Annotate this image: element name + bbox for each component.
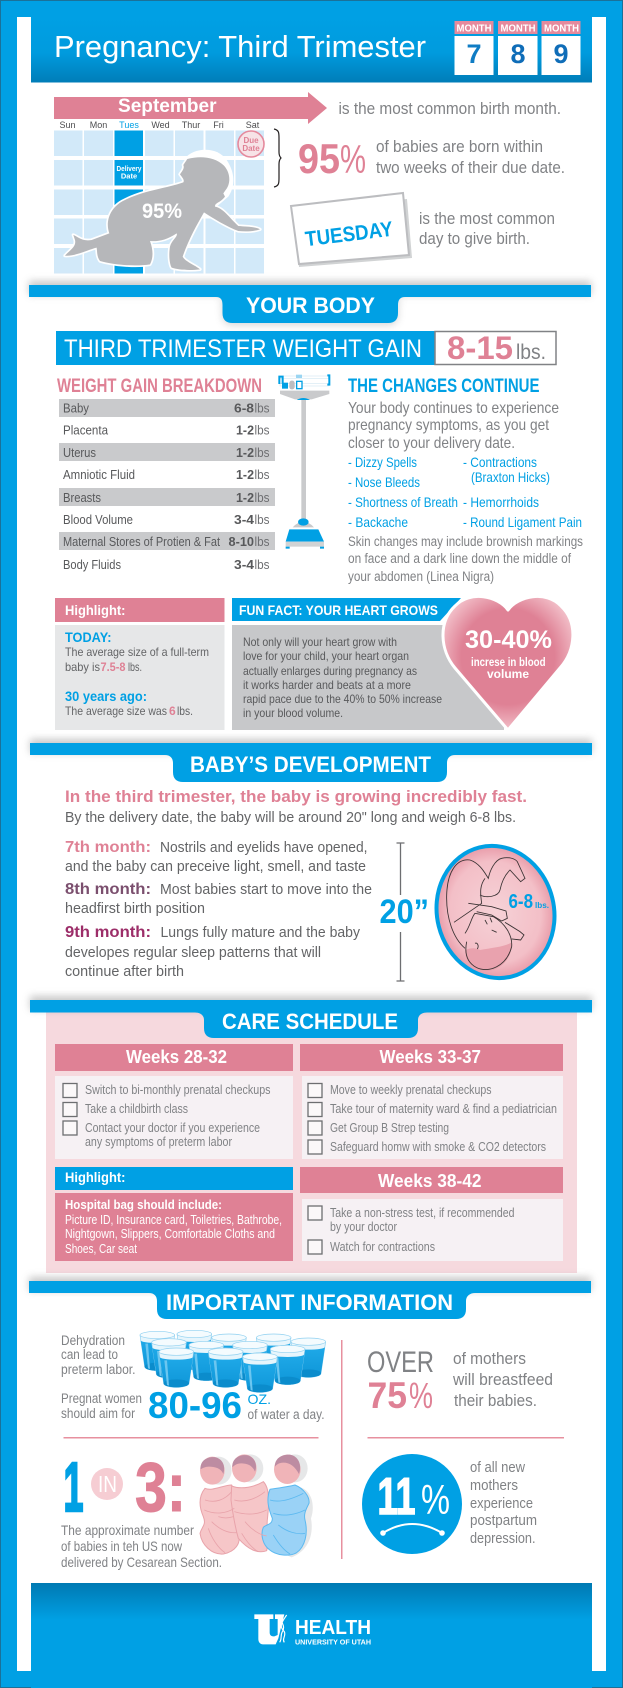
calendar with crawling baby: [54, 120, 264, 274]
pink dividers: [64, 1340, 564, 1559]
panel: weeks 28-32: Weeks 28-32: [126, 1046, 227, 1067]
the changes continue: pregnancy symptoms, as you get: [348, 417, 549, 434]
panel: weeks 33-37: Move to weekly prenatal checkups: [330, 1082, 492, 1097]
dehydration text: Dehydration: [61, 1333, 125, 1348]
1 in 3 stat: 1: [64, 1448, 84, 1526]
panel: hospital bag highlight: Hospital bag should include:: [65, 1197, 222, 1212]
panel: weeks 33-37: Weeks 33-37: [380, 1046, 481, 1067]
most common birth month text: is the most common birth month.: [338, 99, 561, 118]
panel: weeks 38-42: Watch for contractions: [330, 1239, 435, 1254]
the changes continue: - Shortness of Breath: [348, 494, 458, 510]
over 75 percent stat: their babies.: [454, 1391, 537, 1410]
weight gain breakdown table: lbs: [254, 557, 270, 572]
panel: weeks 33-37: [300, 1044, 563, 1159]
month calendar cards: [454, 21, 580, 75]
due date circle: Due: [243, 136, 259, 145]
panel: highlight today vs 30 years ago: lbs.: [128, 660, 142, 674]
1 in 3 stat: IN: [98, 1471, 117, 1497]
baby's development intro: In the third trimester, the baby is growing incredibly fast.: [65, 787, 527, 806]
dehydration text: preterm labor.: [61, 1362, 136, 1377]
weight gain banner: lbs.: [516, 341, 546, 364]
95 percent stat: two weeks of their due date.: [376, 158, 565, 177]
weight gain banner: [56, 330, 556, 366]
weight gain breakdown table: Baby: [63, 400, 89, 416]
weight gain banner: 8-15: [447, 330, 513, 366]
over 75 percent stat: will breastfeed: [452, 1370, 553, 1389]
September arrow: [54, 92, 327, 124]
section heading: your body: [29, 281, 591, 325]
20 inch length ruler: [380, 843, 429, 981]
water amount stat: of water a day.: [248, 1407, 324, 1422]
panel: fun fact heart: rapid pace due to the 40% to 50% increase: [243, 692, 442, 706]
panel: highlight today vs 30 years ago: baby is: [65, 660, 100, 674]
panel: highlight today vs 30 years ago: 7.5-8: [100, 660, 126, 674]
panel: highlight today vs 30 years ago: The average size was: [65, 704, 167, 718]
the changes continue: Skin changes may include brownish markings: [348, 534, 583, 549]
weight gain breakdown table: 1-2: [236, 422, 254, 438]
panel: fun fact heart: it works harder and beats at a more: [243, 678, 411, 692]
panel: weeks 28-32: Take a childbirth class: [85, 1101, 188, 1116]
icon: crawling baby silhouette: [65, 150, 260, 270]
the changes continue: closer to your delivery date.: [348, 435, 515, 452]
September arrow: September: [118, 96, 217, 117]
panel: fun fact heart: love for your child, your heart organ: [243, 649, 409, 663]
calendar with crawling baby: 95%: [142, 200, 182, 223]
month by month development: Nostrils and eyelids have opened,: [160, 839, 368, 856]
month calendar cards: MONTH: [456, 24, 492, 34]
calendar with crawling baby: Mon: [90, 120, 107, 130]
weight gain breakdown table: [57, 376, 275, 572]
11 percent stat: 11: [378, 1468, 416, 1526]
panel: weeks 33-37: Get Group B Strep testing: [330, 1120, 449, 1135]
calendar with crawling baby: Delivery: [116, 164, 142, 173]
weight gain breakdown table: Uterus: [63, 445, 96, 460]
over 75 percent stat: of mothers: [453, 1349, 526, 1368]
month calendar cards: 7: [466, 39, 482, 69]
panel: weeks 38-42: Take a non-stress test, if recommended: [330, 1205, 514, 1220]
section heading: your body: YOUR BODY: [246, 293, 375, 318]
month by month development: continue after birth: [65, 963, 184, 980]
logo: University of Utah Health: [254, 1614, 371, 1646]
panel: fun fact heart: [232, 596, 573, 730]
panel: fun fact heart: FUN FACT: YOUR HEART GROWS: [239, 602, 438, 618]
icon: heart callout: 30-40%: [465, 626, 552, 654]
header banner: [31, 17, 592, 82]
the changes continue: - Contractions: [463, 454, 537, 470]
month calendar cards: 9: [553, 39, 569, 69]
95 percent stat: %: [340, 138, 366, 182]
panel: highlight today vs 30 years ago: Highlight:: [65, 602, 126, 618]
calendar with crawling baby: Tues: [119, 120, 139, 130]
95 percent stat: of babies are born within: [376, 137, 543, 156]
panel: weeks 28-32: Contact your doctor if you experience: [85, 1120, 260, 1135]
weight gain banner: THIRD TRIMESTER WEIGHT GAIN: [64, 335, 422, 363]
panel: fun fact heart: Not only will your heart grow with: [243, 635, 397, 649]
panel: highlight today vs 30 years ago: lbs.: [177, 704, 193, 718]
1 in 3 stat: delivered by Cesarean Section.: [61, 1554, 222, 1570]
panel: hospital bag highlight: Shoes, Car seat: [65, 1241, 137, 1256]
11 percent stat: postpartum: [470, 1513, 537, 1529]
the changes continue: - Backache: [348, 514, 408, 530]
month by month development: 7th month:: [65, 839, 151, 856]
curly bracket: [274, 129, 281, 187]
the changes continue: on face and a dark line down the middle of: [348, 551, 571, 566]
footer banner: [31, 1583, 592, 1688]
over 75 percent stat: %: [409, 1375, 433, 1416]
11 percent stat: of all new: [470, 1460, 525, 1476]
weight gain breakdown table: 1-2: [236, 445, 254, 460]
11 percent stat: [362, 1454, 537, 1554]
section: care schedule: [30, 996, 592, 1273]
due date circle: [238, 131, 264, 157]
panel: highlight today vs 30 years ago: 6: [169, 704, 176, 718]
1 in 3 stat: 3:: [135, 1448, 186, 1526]
the changes continue: Your body continues to experience: [348, 400, 559, 417]
section heading: care schedule: CARE SCHEDULE: [222, 1009, 398, 1034]
weight gain breakdown table: Maternal Stores of Protien & Fat: [63, 534, 220, 549]
calendar with crawling baby: Sun: [59, 120, 76, 130]
most common day text: [419, 209, 555, 248]
over 75 percent stat: 75: [368, 1375, 407, 1416]
dehydration text: [61, 1333, 142, 1421]
section heading: care schedule: [30, 996, 592, 1038]
over 75 percent stat: OVER: [367, 1346, 434, 1379]
icon: fetus in womb: [423, 833, 568, 991]
panel: weeks 28-32: Switch to bi-monthly prenatal checkups: [85, 1082, 271, 1097]
panel: hospital bag highlight: Highlight:: [65, 1169, 126, 1185]
panel: weeks 28-32: [55, 1044, 293, 1159]
month by month development: Most babies start to move into the: [160, 881, 372, 898]
baby's development intro: By the delivery date, the baby will be around 20" long and weigh 6-8 lbs.: [65, 809, 516, 826]
panel: highlight today vs 30 years ago: The average size of a full-term: [65, 645, 209, 659]
11 percent stat: experience: [470, 1496, 533, 1512]
logo: University of Utah Health: HEALTH: [295, 1617, 371, 1639]
Tuesday calendar card: TUESDAY: [304, 218, 394, 251]
icon: heart callout: volume: [487, 667, 529, 681]
calendar with crawling baby: Thur: [182, 120, 200, 130]
water amount stat: OZ.: [248, 1391, 271, 1407]
panel: weeks 28-32: any symptoms of preterm labor: [85, 1134, 233, 1149]
panel: weeks 38-42: by your doctor: [330, 1219, 398, 1234]
1 in 3 stat: of babies in teh US now: [61, 1538, 183, 1554]
icon: doctor's scale: [279, 375, 329, 549]
weight gain breakdown table: lbs: [254, 422, 270, 438]
weight gain breakdown table: Blood Volume: [63, 512, 133, 527]
section heading: important information: IMPORTANT INFORMATION: [166, 1290, 453, 1315]
95 percent stat: [298, 135, 565, 182]
panel: hospital bag highlight: Nightgown, Slippers, Comfortable Cloths and: [65, 1226, 275, 1241]
panel: hospital bag highlight: Picture ID, Insurance card, Toiletries, Bathrobe,: [65, 1212, 282, 1227]
11 percent stat: depression.: [470, 1531, 536, 1547]
11 percent stat: mothers: [470, 1478, 518, 1494]
calendar with crawling baby: Fri: [213, 120, 224, 130]
11 percent stat: %: [421, 1476, 450, 1523]
dehydration text: Pregnat women: [61, 1391, 142, 1406]
the changes continue: - Nose Bleeds: [348, 474, 420, 490]
weight gain breakdown table: 3-4: [234, 557, 255, 572]
panel: highlight today vs 30 years ago: [55, 598, 224, 730]
weight gain breakdown table: Amniotic Fluid: [63, 467, 135, 482]
the changes continue: [348, 376, 583, 584]
panel: highlight today vs 30 years ago: 30 years ago:: [65, 688, 147, 704]
weight gain breakdown table: Placenta: [63, 422, 109, 438]
the changes continue: - Dizzy Spells: [348, 454, 417, 470]
calendar with crawling baby: Wed: [151, 120, 170, 130]
month by month development: 8th month:: [65, 881, 151, 898]
section heading: important information: [29, 1277, 591, 1319]
weight gain breakdown table: lbs: [254, 400, 270, 416]
weight gain breakdown table: lbs: [254, 467, 270, 482]
20 inch length ruler: 20”: [380, 893, 429, 931]
weight gain breakdown table: 1-2: [236, 490, 254, 505]
baby's development intro: [65, 787, 527, 826]
weight gain breakdown table: 6-8: [234, 400, 254, 416]
1 in 3 stat: The approximate number: [61, 1522, 194, 1538]
due date circle: Date: [242, 144, 260, 153]
weight gain breakdown table: WEIGHT GAIN BREAKDOWN: [57, 376, 262, 397]
calendar with crawling baby: Date: [121, 172, 137, 180]
panel: highlight today vs 30 years ago: TODAY:: [65, 629, 112, 645]
weight gain breakdown table: 8-10: [228, 534, 254, 549]
icon: swaddled babies: [200, 1454, 313, 1557]
dehydration text: can lead to: [61, 1347, 118, 1362]
icon: heart callout: increse in blood: [471, 655, 546, 669]
water amount stat: [148, 1385, 324, 1426]
most common day text: is the most common: [419, 209, 555, 228]
most common day text: day to give birth.: [419, 229, 530, 248]
1 in 3 stat: [61, 1448, 222, 1570]
panel: hospital bag highlight: [55, 1167, 293, 1261]
month by month development: Lungs fully mature and the baby: [160, 924, 360, 941]
panel: weeks 33-37: Safeguard homw with smoke & CO2 detectors: [330, 1139, 546, 1154]
the changes continue: - Hemorrhoids: [463, 494, 539, 510]
weight gain breakdown table: Breasts: [63, 490, 101, 505]
weight gain breakdown table: lbs: [254, 490, 270, 505]
month by month development: developes regular sleep patterns that will: [65, 944, 321, 961]
month by month development: headfirst birth position: [65, 900, 205, 917]
calendar with crawling baby: Sat: [246, 120, 260, 130]
title: Pregnancy: Third Trimester: [54, 29, 426, 64]
icon: water glasses: [140, 1330, 326, 1392]
month by month development: 9th month:: [65, 924, 151, 941]
Tuesday calendar card: [291, 193, 412, 267]
water amount stat: 80-96: [148, 1385, 242, 1426]
weight gain breakdown table: 1-2: [236, 467, 254, 482]
over 75 percent stat: [367, 1346, 553, 1416]
weight gain breakdown table: lbs: [254, 512, 270, 527]
dehydration text: should aim for: [61, 1406, 135, 1421]
95 percent stat: 95: [298, 135, 340, 182]
month calendar cards: MONTH: [544, 24, 579, 34]
icon: fetus in womb: 6-8: [508, 891, 533, 913]
weight gain breakdown table: lbs: [254, 534, 270, 549]
the changes continue: - Round Ligament Pain: [463, 514, 582, 530]
month by month development: and the baby can preceive light, smell, and taste: [65, 858, 366, 875]
logo: University of Utah Health: UNIVERSITY OF UTAH: [295, 1638, 371, 1646]
the changes continue: THE CHANGES CONTINUE: [348, 376, 540, 397]
month calendar cards: MONTH: [500, 24, 536, 34]
weight gain breakdown table: Body Fluids: [63, 557, 121, 572]
icon: fetus in womb: lbs.: [535, 901, 549, 910]
panel: fun fact heart: in your blood volume.: [243, 706, 343, 720]
panel: weeks 33-37: Take tour of maternity ward & find a pediatrician: [330, 1101, 557, 1116]
icon: heart callout: [443, 596, 573, 730]
panel: weeks 38-42: [300, 1167, 563, 1261]
panel: fun fact heart: actually enlarges during pregnancy as: [243, 664, 417, 678]
the changes continue: your abdomen (Linea Nigra): [348, 569, 494, 584]
weight gain breakdown table: 3-4: [234, 512, 255, 527]
panel: weeks 38-42: Weeks 38-42: [378, 1170, 482, 1191]
section heading: baby's development: BABY’S DEVELOPMENT: [190, 752, 432, 777]
weight gain breakdown table: lbs: [254, 445, 270, 460]
the changes continue: (Braxton Hicks): [471, 469, 550, 485]
month calendar cards: 8: [510, 39, 526, 69]
section heading: baby's development: [30, 739, 592, 782]
month by month development: [65, 839, 372, 980]
